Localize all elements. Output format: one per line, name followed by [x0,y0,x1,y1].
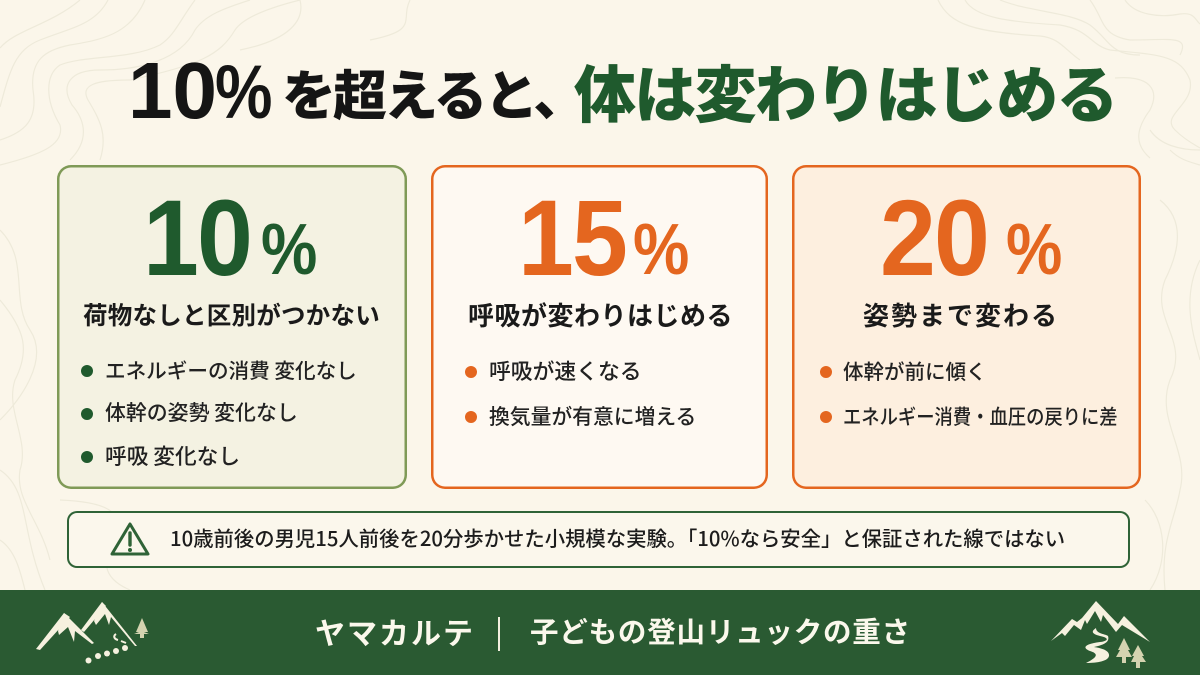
footer title: ヤマカルテ [315,609,475,653]
bullet text: 呼吸が速くなる [489,355,642,386]
heading: 呼吸が変わりはじめる [468,296,733,333]
percent sign: % [633,210,689,290]
heading: 姿勢まで変わる [863,296,1059,333]
percent sign: % [1006,210,1062,290]
footer subtitle: 子どもの登山リュックの重さ [530,610,911,651]
title: percent sign: % [215,50,272,135]
bullet dot [820,411,832,423]
bullet dot [820,366,832,378]
big number 20: 20 [880,177,988,298]
footer divider [498,617,500,651]
bullet dot [81,365,93,377]
bullet dot [81,408,93,420]
bullet dot [81,451,93,463]
callout: caveat note [67,511,1130,568]
big number 10: 10 [143,177,251,298]
bullet text: 呼吸 変化なし [105,440,240,471]
icon: warning triangle [110,522,150,556]
footer band [0,590,1200,675]
bullet dot [465,366,477,378]
title: black kana: を超えると、 [282,52,584,131]
heading: 荷物なしと区別がつかない [83,297,380,332]
bullet text: 体幹の姿勢 変化なし [105,397,298,427]
panel: 15% [431,165,768,489]
percent sign: % [261,210,317,290]
note text: 10歳前後の男児15人前後を20分歩かせた小規模な実験。「10%なら安全」と保証された線ではない [170,522,1065,552]
icon: mountains with dotted trail [36,602,149,664]
title: number 10: 10 [128,46,217,135]
bullet text: エネルギー消費・血圧の戻りに差 [843,400,1118,430]
bullet text: エネルギーの消費 変化なし [105,354,357,384]
title [128,45,1117,135]
bullet dot [465,411,477,423]
icon: mountain with river and trees [1051,601,1150,668]
big number 15: 15 [518,177,626,298]
title: green part: 体は変わりはじめる [574,45,1117,135]
panel: 20% [792,165,1141,489]
bullet text: 換気量が有意に増える [489,400,696,430]
panel: 10% [57,165,407,489]
bullet text: 体幹が前に傾く [843,355,986,385]
